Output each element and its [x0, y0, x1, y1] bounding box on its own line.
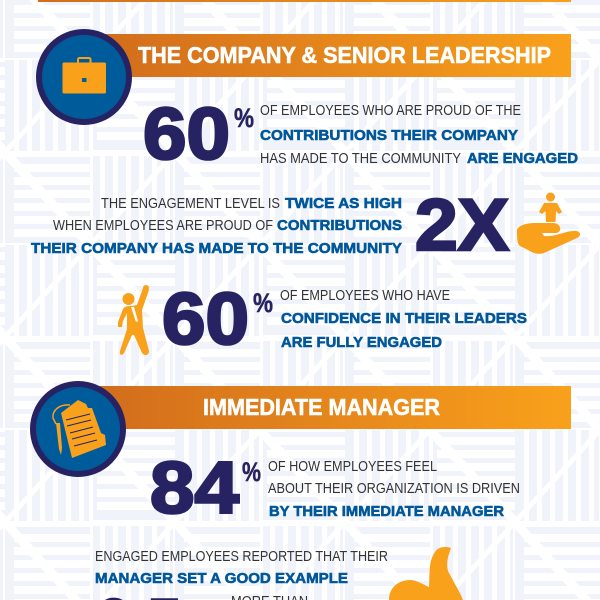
icon: thumbs up	[389, 547, 463, 600]
banner: immediate manager: IMMEDIATE MANAGER	[203, 394, 440, 420]
text block: driven by immediate manager: OF HOW EMPLOYEES FEEL	[268, 458, 437, 475]
banner: the company and senior leadership	[105, 34, 571, 77]
text block: proud of contributions: OF EMPLOYEES WHO ARE PROUD OF THE	[260, 102, 521, 119]
text block: driven by immediate manager	[268, 458, 520, 520]
text block: confidence in leaders: ARE FULLY ENGAGED	[281, 334, 442, 351]
text block: manager set a good example: MANAGER SET A GOOD EXAMPLE	[95, 570, 348, 587]
icon: man raising fist	[118, 285, 149, 355]
banner: the company and senior leadership: THE COMPANY & SENIOR LEADERSHIP	[138, 42, 551, 68]
text block: confidence in leaders: OF EMPLOYEES WHO HAVE	[280, 287, 450, 304]
top orange strip	[38, 0, 571, 2]
icon: hand holding child	[517, 192, 580, 254]
banner: immediate manager	[100, 386, 571, 429]
text block: proud of contributions: CONTRIBUTIONS THEIR COMPANY	[260, 127, 518, 144]
icon: briefcase in circle	[39, 32, 129, 122]
text block: proud of contributions: ARE ENGAGED	[467, 150, 578, 167]
text block: engagement twice as high	[31, 195, 402, 257]
text block: engagement twice as high: WHEN EMPLOYEES ARE PROUD OF	[53, 217, 273, 234]
stat: 2X: 2X	[415, 185, 509, 266]
stat: 60 percent confidence: 60	[162, 279, 249, 360]
text block: engagement twice as high: THE ENGAGEMENT LEVEL IS	[101, 195, 280, 212]
stat: 84 percent: %	[242, 457, 261, 487]
stat: 60 percent proud: %	[234, 103, 254, 133]
text block: manager set a good example: ENGAGED EMPLOYEES REPORTED THAT THEIR	[95, 548, 388, 565]
text block: confidence in leaders: CONFIDENCE IN THEIR LEADERS	[281, 310, 527, 327]
text block: proud of contributions	[260, 102, 578, 167]
text block: engagement twice as high: TWICE AS HIGH	[285, 195, 402, 212]
text block: proud of contributions: HAS MADE TO THE COMMUNITY	[260, 150, 461, 167]
stat: 60 percent proud: 60	[143, 94, 230, 175]
text block: driven by immediate manager: ABOUT THEIR ORGANIZATION IS DRIVEN	[268, 480, 520, 497]
text block: confidence in leaders	[280, 287, 527, 351]
icon: notepad and pen in circle	[33, 384, 123, 474]
text block: engagement twice as high: CONTRIBUTIONS	[277, 217, 402, 234]
panel: the company and senior leadership	[31, 32, 580, 360]
text block: manager set a good example	[95, 548, 388, 587]
text block: engagement twice as high: THEIR COMPANY HAS MADE TO THE COMMUNITY	[31, 240, 402, 257]
stat: 60 percent confidence: %	[253, 288, 273, 318]
text block: driven by immediate manager: BY THEIR IMMEDIATE MANAGER	[269, 503, 504, 520]
panel: immediate manager	[33, 384, 571, 600]
stat: 84 percent: 84	[150, 448, 239, 529]
